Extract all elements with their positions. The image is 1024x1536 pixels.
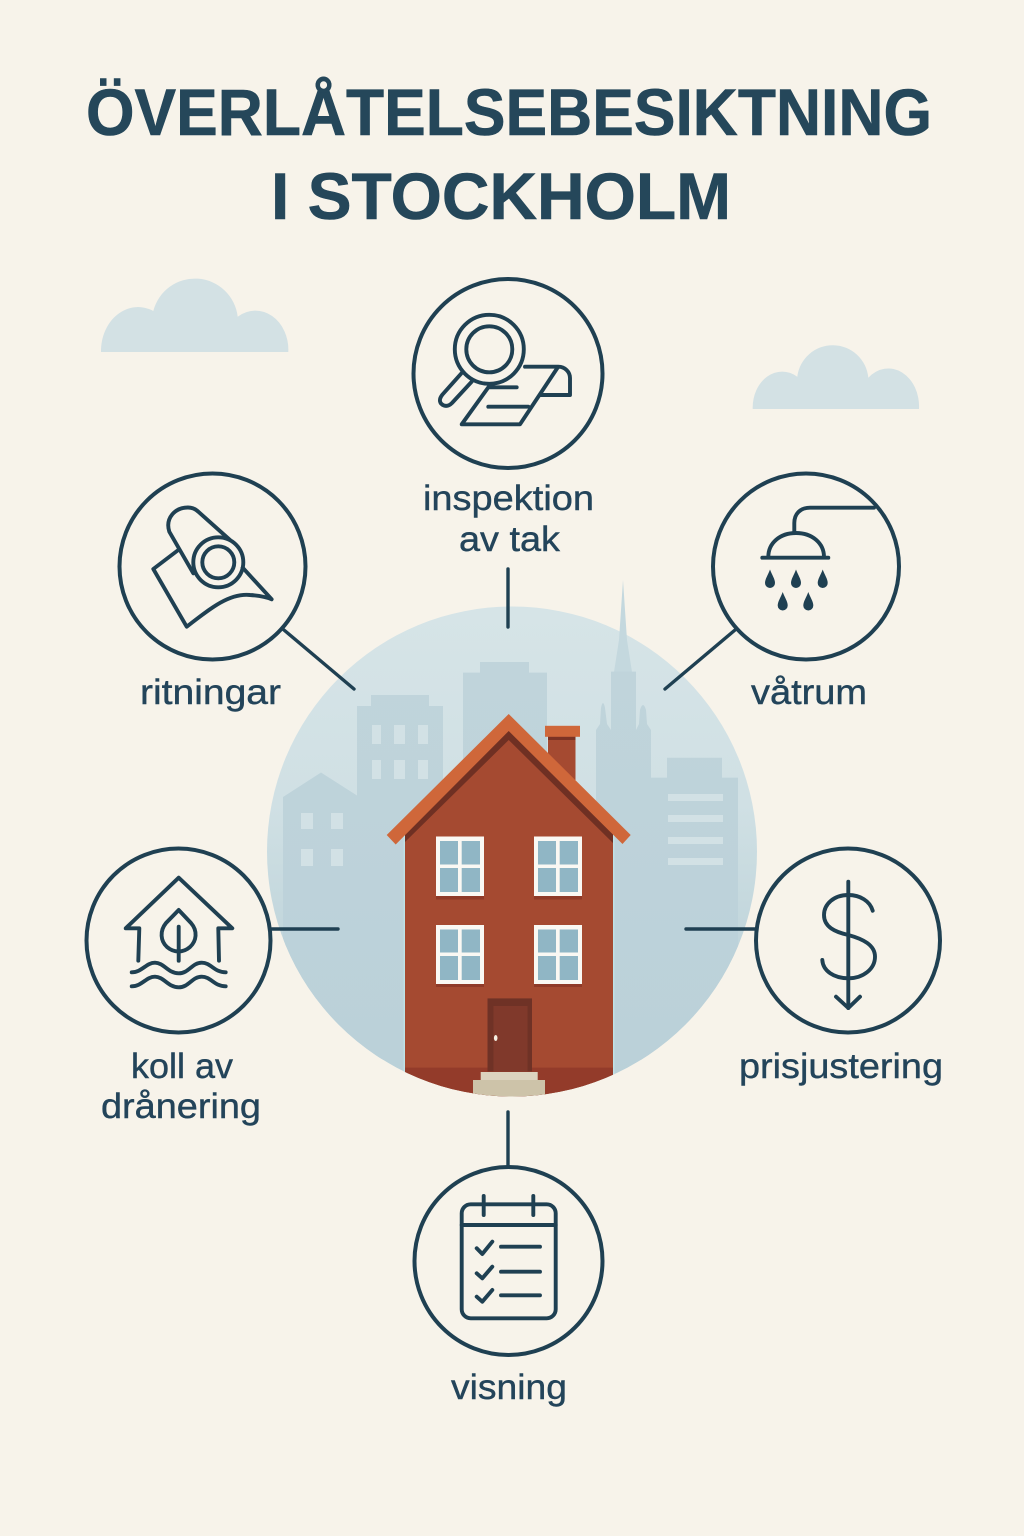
label: drånering: [101, 1087, 261, 1126]
building: right block: [651, 758, 738, 1060]
icon: magnifier over roof sheet: [440, 315, 570, 424]
label: [423, 479, 594, 559]
building: centre tower: [463, 662, 547, 759]
door: [488, 998, 532, 1071]
label: våtrum: [751, 673, 867, 712]
item: våtrum: [713, 474, 899, 712]
label: visning: [451, 1368, 567, 1407]
cathedral spire: [614, 580, 632, 672]
label: ritningar: [140, 673, 281, 712]
roof: [387, 714, 631, 844]
building: cathedral: [596, 672, 651, 1060]
building windows: [301, 725, 723, 866]
window: lower left: [436, 925, 484, 987]
label: koll av: [131, 1047, 234, 1086]
cloud: left: [101, 279, 288, 352]
connector lines: [272, 569, 756, 1167]
icon: shower: [762, 508, 874, 610]
window: lower right: [534, 925, 582, 987]
house: [387, 714, 631, 1100]
label: av tak: [459, 520, 561, 559]
icon ring: [86, 848, 270, 1032]
item: koll av dränering: [86, 848, 270, 1126]
icon: dollar with down arrow: [822, 882, 875, 1008]
icon: checklist calendar: [462, 1196, 556, 1318]
icon: house with leaf and water: [126, 878, 232, 987]
city skyline: [283, 662, 738, 1060]
building: gabled left: [283, 772, 357, 1060]
front steps: [473, 1072, 545, 1096]
item: inspektion av tak: [414, 279, 602, 559]
house body: [404, 731, 614, 1100]
title: [86, 75, 932, 233]
icon ring: [414, 279, 602, 468]
icon ring: [756, 848, 940, 1032]
icon ring: [713, 474, 899, 660]
city backdrop circle: [267, 606, 757, 1096]
icon: rolled drawings: [153, 508, 272, 627]
icon ring: [120, 474, 306, 660]
item: visning: [414, 1167, 602, 1407]
central scene: city and house: [267, 580, 757, 1100]
label: inspektion: [423, 479, 594, 518]
cloud: right: [753, 345, 919, 409]
building: left tower: [357, 695, 443, 1060]
title: ÖVERLÅTELSEBESIKTNING: [86, 75, 932, 149]
roof shadow: [405, 725, 613, 843]
chimney: [545, 726, 580, 780]
window: upper left: [436, 836, 484, 900]
title: I STOCKHOLM: [271, 159, 731, 233]
item: prisjustering: [739, 848, 943, 1086]
label: prisjustering: [739, 1047, 943, 1086]
item: ritningar: [120, 474, 306, 712]
label: [101, 1047, 261, 1126]
icon ring: [414, 1167, 602, 1355]
window: upper right: [534, 836, 582, 900]
